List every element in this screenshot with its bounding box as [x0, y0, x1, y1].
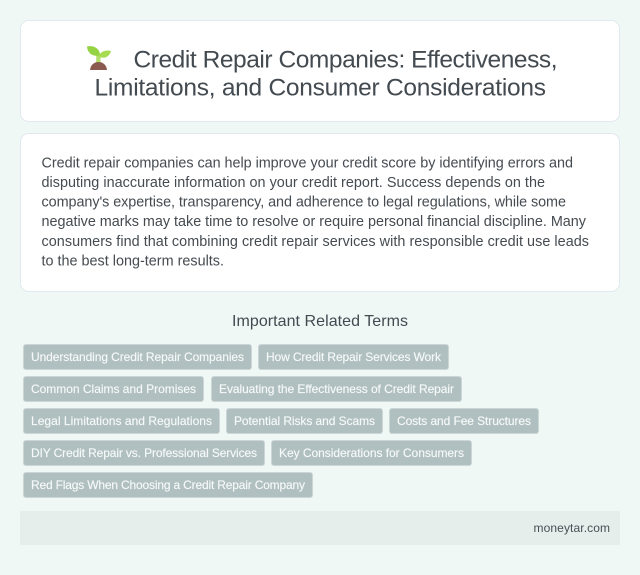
tag: DIY Credit Repair vs. Professional Services	[31, 446, 257, 460]
tag	[226, 408, 382, 434]
tag: Legal Limitations and Regulations	[31, 414, 212, 428]
tag	[390, 408, 538, 434]
footer: moneytar.com	[534, 521, 610, 535]
tag	[24, 408, 220, 434]
tag	[258, 344, 448, 370]
tag: Evaluating the Effectiveness of Credit Repair	[219, 382, 454, 396]
tag	[24, 376, 204, 402]
heading: important related terms: Important Related Terms	[232, 313, 408, 330]
summary text: disputing inaccurate information on your credit report. Success depends on the	[42, 175, 545, 191]
summary text: negative marks may take time to resolve or require personal financial discipline. Many	[42, 214, 587, 230]
tag	[24, 344, 252, 370]
summary text: to the best long-term results.	[42, 254, 224, 270]
footer	[20, 511, 620, 545]
tag: Common Claims and Promises	[31, 382, 196, 396]
tag	[24, 472, 312, 498]
tag	[272, 440, 472, 466]
panel: title card	[20, 20, 620, 122]
tag	[212, 376, 462, 402]
tag: Key Considerations for Consumers	[279, 446, 464, 460]
tag: Costs and Fee Structures	[397, 414, 531, 428]
summary text: Credit repair companies can help improve your credit score by identifying errors and	[42, 156, 573, 172]
summary text	[42, 156, 589, 270]
tag: Potential Risks and Scams	[234, 414, 375, 428]
icon: seedling	[87, 46, 111, 70]
tag list	[24, 344, 538, 498]
summary text: consumers find that combining credit repair services with responsible credit use leads	[42, 234, 589, 250]
title text: Limitations, and Consumer Considerations	[94, 75, 546, 102]
tag: How Credit Repair Services Work	[266, 350, 442, 364]
summary text: company's expertise, transparency, and adherence to legal regulations, while some	[42, 194, 566, 210]
tag: Red Flags When Choosing a Credit Repair Company	[31, 478, 305, 492]
title text	[94, 46, 558, 102]
title text: Credit Repair Companies: Effectiveness,	[134, 46, 558, 74]
panel: summary card	[20, 134, 620, 292]
tag	[24, 440, 264, 466]
tag: Understanding Credit Repair Companies	[31, 350, 244, 364]
